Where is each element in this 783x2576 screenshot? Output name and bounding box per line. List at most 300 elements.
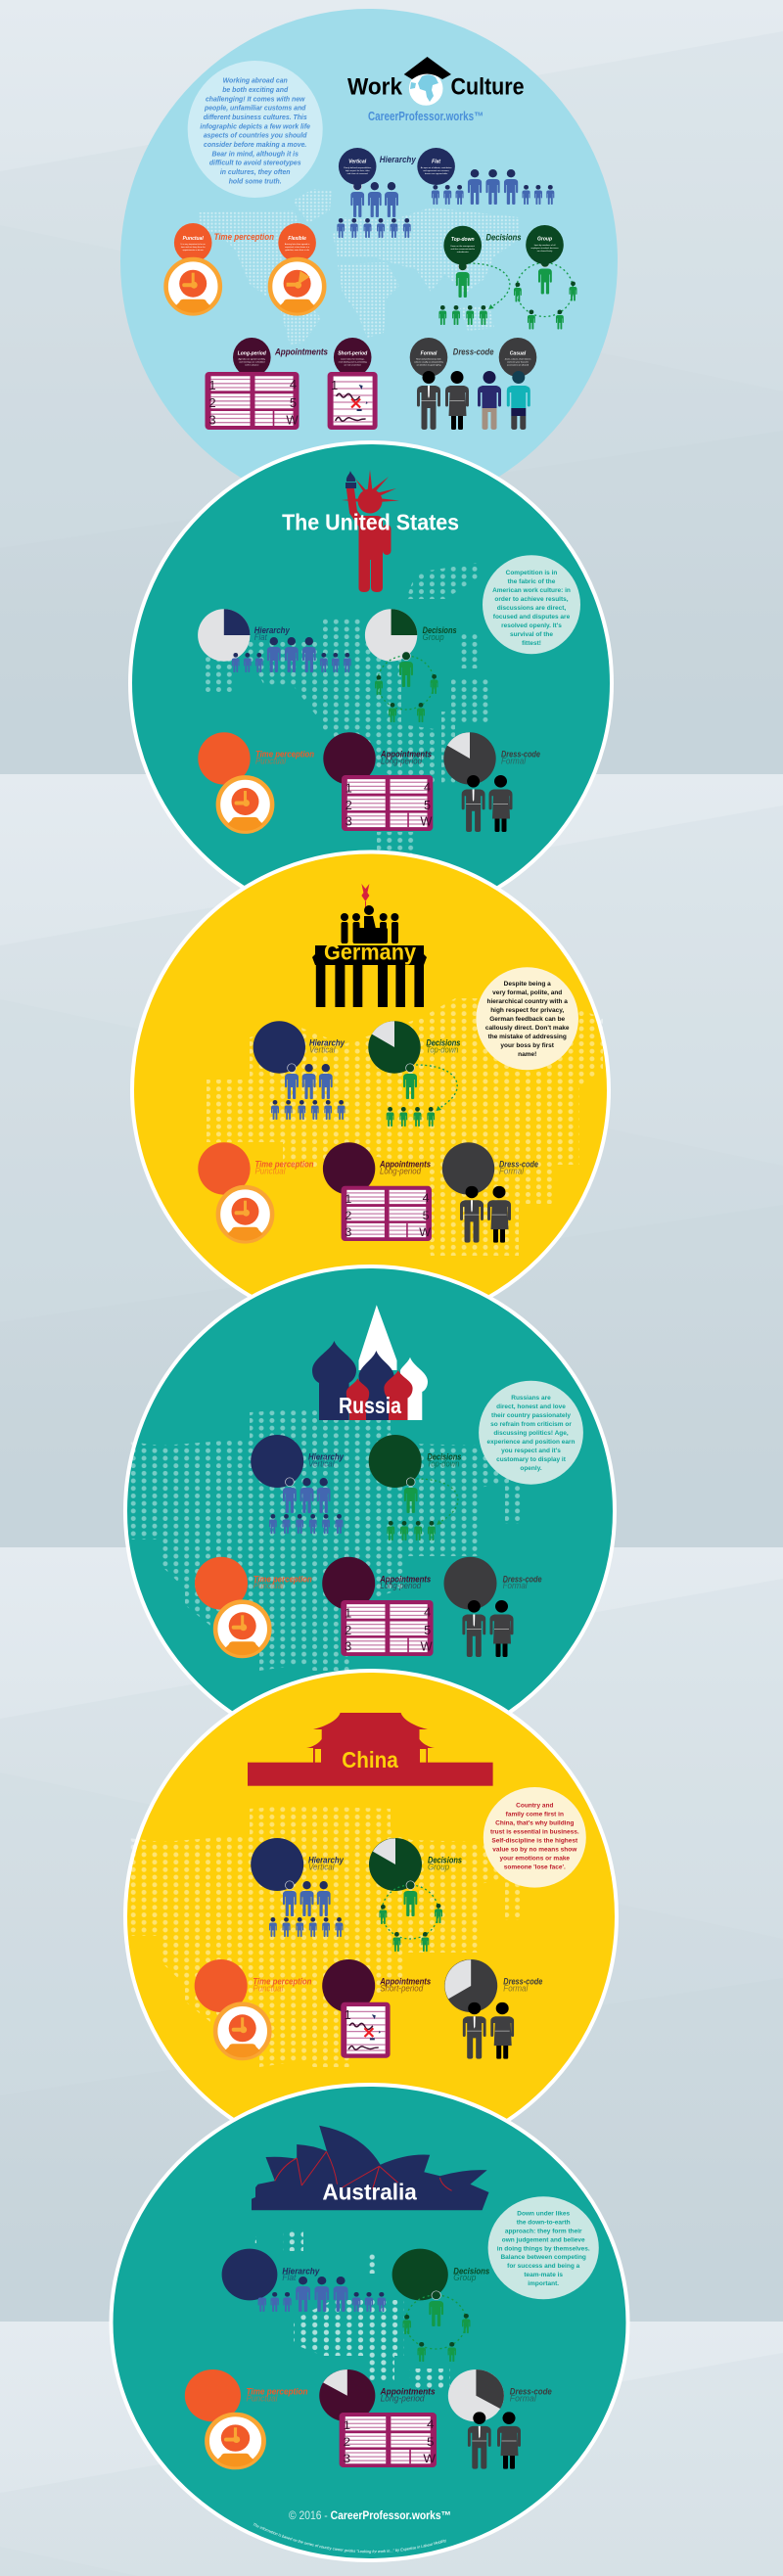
figures: vertical hierarchy (269, 1881, 343, 1937)
icon: calendar: 5 (424, 1624, 431, 1637)
icon: punctual clock (166, 259, 220, 313)
icon: calendar: 1 (345, 1192, 351, 1206)
label: hierarchy (308, 1856, 345, 1873)
dot map: China (128, 1806, 523, 2067)
icon: calendar: 5 (427, 2435, 434, 2449)
callout: United States: survival of the (510, 631, 553, 638)
callout: China: Self-discipline is the highest (491, 1838, 578, 1845)
figures: formal couple (468, 2412, 521, 2469)
icon: Brandenburg Gate (312, 884, 427, 1007)
intro text bubble: people, unfamiliar customs and (204, 106, 306, 113)
heading: decisions: Decisions (485, 232, 521, 243)
label: time perception (253, 1574, 312, 1591)
figures: group decisions (514, 258, 577, 329)
heading: dress-code: Dress-code (453, 346, 494, 357)
pie: time perception (198, 732, 251, 785)
figures: flat hierarchy (432, 169, 554, 205)
panel: Australia (110, 2083, 630, 2562)
figures: formal couple (462, 1600, 513, 1657)
icon: calendar: 4 (427, 2417, 434, 2431)
callout: Germany: callously direct. Don't make (485, 1025, 570, 1032)
bubble: flexible (278, 223, 316, 262)
callout: Australia: Down under likes (517, 2211, 570, 2218)
callout: Russia: experience and position earn (487, 1439, 575, 1446)
label: time perception: Time perception (247, 2387, 308, 2398)
hierarchy section (337, 148, 554, 238)
callout: Germany: high respect for privacy, (490, 1007, 564, 1014)
label: decisions: Decisions (453, 2266, 489, 2277)
title: Work Culture: Culture (450, 74, 525, 101)
label: dress-code: Formal (501, 757, 527, 767)
label: dress-code: Formal (503, 1581, 528, 1591)
figures: casual man and person (478, 371, 530, 430)
icon: calendar: 4 (424, 780, 431, 794)
decisions section (438, 225, 577, 329)
bubble: top-down: Down on the management (451, 245, 475, 248)
icon: short-period calendar (328, 372, 378, 430)
title: Australia: Australia (322, 2180, 417, 2205)
label: dress-code: Formal (499, 1167, 525, 1177)
bubble: formal: an attention to good styling (417, 364, 441, 366)
dot map: United States (206, 563, 488, 861)
callout: United States: the fabric of the (508, 578, 556, 585)
title: Work Culture (347, 57, 525, 106)
intro text bubble (188, 61, 323, 198)
icon: calendar: 5 (423, 1209, 430, 1222)
label: dress-code: Dress-code (499, 1160, 539, 1171)
icon: calendar: 4 (423, 1191, 430, 1205)
callout: Germany: your boss by first (500, 1042, 555, 1049)
bubble: top-down: Top-down (451, 237, 475, 243)
label: dress-code: Formal (503, 1983, 529, 1995)
bubble: flat: and agreement are common; (423, 169, 449, 172)
title: Germany: Germany (324, 940, 416, 965)
bubble: flexible: Flexible (288, 236, 306, 242)
bubble: flat: bosses are approachable (425, 172, 448, 175)
pie: hierarchy flat (222, 2249, 277, 2300)
figures: formal couple (462, 775, 513, 832)
pie: time perception (185, 2369, 241, 2421)
label: decisions (423, 625, 457, 643)
label: decisions: Group (428, 1863, 449, 1873)
label: decisions: Top-down (427, 1458, 459, 1470)
icon: calendar: W (421, 1640, 433, 1654)
callout: China: your emotions or make (500, 1856, 570, 1863)
label: time perception: Time perception (253, 1574, 312, 1585)
figures: group decisions (379, 1881, 442, 1952)
bubble: formal: Neat and professional, dark (416, 358, 442, 360)
bubble: top-down: subordinates (457, 251, 469, 253)
label: hierarchy: Flat (254, 632, 267, 643)
bubble: long-period: Agendas are agreed carefully, (239, 358, 266, 360)
label: appointments (380, 750, 432, 767)
label: dress-code: Dress-code (510, 2387, 552, 2398)
callout: Russia: direct, honest and love (496, 1403, 566, 1410)
icon: calendar: W (421, 815, 433, 829)
bubble: short-period (334, 338, 372, 377)
icon: short-period calendar (341, 2002, 391, 2058)
callout: Germany: German feedback can be (489, 1016, 566, 1023)
title: The United States: The United States (282, 510, 459, 535)
label: time perception (253, 1977, 312, 1995)
pie: dress-code (443, 732, 496, 785)
label: hierarchy: Hierarchy (308, 1452, 345, 1463)
label: hierarchy (308, 1452, 345, 1470)
callout: China (484, 1787, 586, 1888)
callout: United States: discussions are direct, (497, 605, 566, 612)
icon: calendar (340, 2413, 437, 2467)
bubble: vertical (339, 148, 377, 185)
label: decisions (428, 1856, 462, 1873)
bubble: long-period: and meetings are scheduled (239, 360, 265, 364)
bubble: flat: Flat (432, 160, 440, 165)
label: appointments (379, 1574, 431, 1591)
label: decisions: Group (453, 2273, 476, 2283)
callout: China: family come first in (506, 1812, 564, 1818)
callout: Germany: very formal, polite, and (492, 989, 562, 996)
label: decisions: Decisions (427, 1452, 461, 1463)
bubble: punctual (174, 223, 211, 262)
icon: long-period calendar: 5 (290, 395, 297, 410)
intro text bubble: in cultures, they often (220, 169, 291, 176)
label: dress-code: Dress-code (503, 1574, 542, 1585)
intro text bubble: aspects of countries you should (204, 133, 307, 140)
pie: time perception (195, 1959, 248, 2012)
label: decisions: Decisions (426, 1038, 460, 1049)
bubble: top-down: and then communicated to (450, 248, 476, 251)
label: appointments: Appointments (379, 1160, 431, 1171)
icon: long-period calendar (206, 372, 299, 430)
callout: United States: focused and disputes are (493, 614, 571, 621)
pie: dress-code (442, 1142, 494, 1195)
callout: Australia: team-mate is (524, 2272, 563, 2278)
intro text bubble: be both exciting and (222, 87, 289, 94)
label: dress-code (501, 750, 541, 767)
label: time perception: Punctual (247, 2394, 278, 2404)
label: time perception: Time perception (253, 1977, 312, 1988)
bubble: long-period: well in advance (245, 364, 259, 366)
icon: calendar (342, 1186, 432, 1241)
bubble: punctual: time and not keep them for (181, 246, 206, 249)
callout: United States: Competition is in (506, 570, 557, 576)
icon: calendar: 2 (345, 1209, 351, 1222)
bubble: flexible: expected; a time frame is a (285, 246, 310, 249)
callout: Germany (476, 967, 578, 1070)
panel: introduction (120, 9, 618, 514)
bubble: group: employees involved; decisions (530, 248, 559, 250)
figures: top-down decisions (387, 1478, 458, 1541)
panel: Germany (132, 851, 609, 1329)
icon: Statue of Liberty (342, 470, 399, 592)
icon: clock (215, 2004, 269, 2058)
intro text bubble: Bear in mind, although it is (211, 151, 299, 158)
callout: Russia: their country passionately (491, 1412, 571, 1419)
callout: Australia: own judgement and believe (502, 2236, 585, 2243)
label: decisions: Group (423, 632, 444, 643)
figures: formal couple (460, 1186, 511, 1243)
label: decisions: Decisions (428, 1856, 462, 1866)
panel: Russia (125, 1266, 615, 1756)
pie: appointments (323, 732, 376, 785)
label: appointments: Long-period (380, 1167, 422, 1177)
icon: short-period calendar: 1 (331, 378, 338, 392)
title: Work Culture: Work (347, 74, 403, 101)
intro text bubble: difficult to avoid stereotypes (209, 161, 301, 167)
label: hierarchy: Hierarchy (254, 625, 290, 636)
label: decisions: Decisions (423, 625, 457, 636)
time perception section (166, 223, 324, 313)
label: hierarchy: Flat (282, 2273, 297, 2283)
pie: appointments (323, 1142, 375, 1195)
label: dress-code (499, 1160, 539, 1177)
icon: Sydney Opera House (252, 2126, 489, 2210)
callout: Australia: the down-to-earth (517, 2220, 571, 2227)
icon: clock (218, 1187, 272, 1241)
bubble: group: Input by members of all (534, 244, 556, 247)
callout: Russia: openly. (520, 1465, 542, 1472)
label: dress-code: Dress-code (503, 1977, 543, 1988)
bubble: group: Group (537, 237, 552, 243)
bubble: flexible: Arriving later than agreed is (285, 243, 309, 246)
icon: flexible clock (270, 259, 324, 313)
label: appointments: Appointments (380, 2387, 436, 2398)
bubble: punctual: It is very important to be on (181, 243, 207, 246)
callout: Russia: customary to display it (496, 1456, 567, 1463)
icon: Kremlin domes (312, 1305, 428, 1420)
pie: hierarchy vertical (251, 1838, 303, 1891)
pie: appointments (319, 2369, 375, 2421)
icon: calendar: 3 (345, 1225, 351, 1239)
icon: calendar: 2 (344, 2435, 350, 2449)
label: decisions: Top-down (426, 1045, 458, 1056)
label: dress-code: Dress-code (501, 750, 541, 760)
bubble: casual (499, 338, 536, 377)
figures: group decisions (402, 2291, 471, 2362)
label: time perception (255, 750, 314, 767)
bubble: vertical: and chain of command (347, 173, 369, 175)
bubble: long-period (233, 338, 271, 377)
callout: China: value so by no means show (492, 1847, 577, 1854)
dot map: Australia (250, 2230, 450, 2388)
pie: decisions top-down (369, 1435, 422, 1488)
callout: Australia: important. (528, 2280, 559, 2287)
heading: appointments: Appointments (274, 346, 328, 357)
panel: The United States (130, 442, 612, 924)
label: hierarchy: Hierarchy (308, 1856, 345, 1866)
callout: Australia: in doing things by themselves. (497, 2245, 590, 2252)
callout: China: trust is essential in business. (490, 1829, 579, 1836)
figures: top-down decisions (438, 262, 510, 325)
icon: clock (215, 1602, 269, 1656)
pie: hierarchy flat (198, 609, 251, 662)
pie: appointments (322, 1959, 375, 2012)
pie: decisions group (369, 1838, 422, 1891)
label: appointments: Long-period (381, 2394, 425, 2404)
label: hierarchy: Vertical (308, 1863, 335, 1873)
title: China: China (342, 1747, 398, 1772)
callout: Germany: the mistake of addressing (488, 1034, 567, 1040)
icon: long-period calendar: 1 (208, 378, 216, 392)
pie: hierarchy vertical (253, 1021, 305, 1074)
icon: calendar: 2 (345, 799, 352, 812)
world dot map (199, 189, 519, 345)
label: appointments: Long-period (380, 1581, 422, 1591)
figures: vertical hierarchy (337, 182, 411, 238)
label: appointments (379, 1160, 431, 1177)
intro text bubble: infographic depicts a few work life (200, 123, 310, 130)
callout: China: Country and (516, 1803, 553, 1810)
label: dress-code (503, 1574, 542, 1591)
callout: Russia: Russians are (511, 1395, 551, 1402)
label: time perception: Punctual (253, 1581, 285, 1591)
bubble: group: are shared freely (537, 250, 553, 253)
label: hierarchy: Vertical (309, 1045, 336, 1056)
callout: China: China, that's why building (495, 1820, 574, 1827)
bubble: formal (410, 338, 447, 377)
brand name: CareerProfessor.works™ (368, 110, 484, 123)
callout: Russia (479, 1381, 583, 1485)
bubble: vertical: Vertical (348, 160, 367, 165)
figures: group decisions (375, 652, 438, 722)
bubble: casual: accessories are allowed (507, 364, 530, 366)
label: time perception (254, 1160, 314, 1177)
callout: Germany: name! (518, 1051, 536, 1058)
label: time perception: Punctual (253, 1983, 284, 1995)
icon: long-period calendar: 3 (208, 413, 216, 427)
icon: calendar: 3 (344, 2451, 350, 2465)
icon: calendar: 3 (345, 815, 352, 829)
icon: calendar: 5 (424, 799, 431, 812)
heading: time perception: Time perception (214, 232, 274, 243)
bubble: casual: Casual (510, 350, 527, 356)
pie: dress-code (444, 1959, 497, 2012)
callout: Australia (488, 2196, 599, 2299)
label: appointments (380, 2387, 436, 2404)
bubble: vertical: Clearly defined responsibilities, (344, 166, 372, 169)
callout: Australia: approach: they form their (505, 2228, 582, 2235)
intro text bubble: different business cultures. This (204, 115, 307, 121)
appointments section (206, 338, 378, 430)
figures: top-down decisions (387, 1064, 457, 1127)
callout: Australia: for success and being a (507, 2263, 580, 2270)
label: appointments: Appointments (380, 750, 432, 760)
icon: clock (218, 777, 272, 832)
label: appointments: Appointments (379, 1574, 431, 1585)
bubble: flat (417, 148, 455, 185)
panel: China (125, 1671, 617, 2162)
bubble: casual: and even your favourite (507, 360, 530, 364)
title: Russia: Russia (339, 1393, 401, 1418)
label: hierarchy: Hierarchy (309, 1038, 345, 1049)
pie: appointments (322, 1557, 375, 1610)
callout: United States: fittest! (522, 640, 541, 647)
heading: hierarchy: Hierarchy (380, 155, 416, 165)
icon: calendar: 1 (345, 1606, 351, 1620)
bubble: short-period: rescheduling and re-scheduling (339, 360, 367, 364)
label: dress-code (510, 2387, 552, 2404)
callout: United States: order to achieve results, (494, 596, 569, 603)
icon: calendar: 4 (424, 1606, 431, 1619)
label: hierarchy: Vertical (308, 1458, 335, 1470)
dot map: Russia (128, 1409, 523, 1671)
pie: time perception (195, 1557, 248, 1610)
icon: calendar: W (419, 1225, 431, 1239)
icon: calendar (342, 775, 433, 831)
figures: vertical hierarchy (269, 1478, 343, 1534)
label: time perception: Time perception (255, 750, 314, 760)
icon: calendar: 1 (344, 2418, 350, 2432)
pie: decisions group (392, 2249, 448, 2300)
pie: hierarchy vertical (251, 1435, 303, 1488)
callout: United States: resolved openly. It's (501, 622, 562, 629)
label: time perception: Punctual (254, 1167, 286, 1177)
bubble: casual: Jeans, colours, short sleeves (505, 358, 530, 360)
label: time perception: Punctual (255, 757, 287, 767)
bubble: formal: colours usually accompanied by (414, 360, 444, 364)
label: appointments: Long-period (381, 757, 423, 767)
bubble: flexible: guideline, more than a rule (285, 249, 310, 252)
label: hierarchy (309, 1038, 345, 1056)
icon: calendar (341, 1600, 434, 1656)
icon: calendar: 2 (345, 1624, 351, 1637)
label: decisions (426, 1038, 460, 1056)
callout: Russia: you respect and it's (501, 1448, 561, 1454)
callout: United States (483, 555, 580, 654)
label: dress-code: Formal (510, 2394, 537, 2404)
icon: long-period calendar: W (286, 413, 299, 427)
icon: Forbidden City gate (248, 1713, 493, 1786)
figures: flat hierarchy (258, 2277, 386, 2312)
callout: Germany: Despite being a (504, 981, 551, 988)
bubble: short-period: Lower notice for meetings, (341, 358, 365, 360)
label: appointments (379, 1977, 431, 1995)
label: time perception (247, 2387, 308, 2404)
bubble: short-period: Short-period (338, 350, 368, 356)
icon: calendar: W (423, 2451, 437, 2465)
bubble: punctual: appointments or dinner (183, 249, 204, 252)
intro text bubble: consider before making a move. (204, 142, 306, 149)
callout: Russia: so refrain from criticism or (490, 1421, 572, 1428)
pie: decisions group (365, 609, 417, 662)
footer: source note on arc: The information is based on the series of country career guides "Looking for work in..." by Expertise in Labour Mobility (253, 2523, 446, 2554)
label: time perception: Time perception (254, 1160, 314, 1171)
figures: formal couple (463, 2002, 514, 2059)
label: hierarchy (282, 2266, 320, 2283)
figures: flat hierarchy (232, 637, 351, 672)
pie: time perception (198, 1142, 251, 1195)
callout: Russia: discussing politics! Age, (493, 1430, 569, 1437)
label: hierarchy (254, 625, 290, 643)
intro text bubble: challenging! It comes with new (206, 96, 305, 103)
label: appointments: Appointments (379, 1977, 431, 1988)
icon: long-period calendar: 4 (290, 377, 297, 391)
bubble: long-period: Long-period (238, 350, 267, 356)
icon: long-period calendar: 2 (208, 395, 216, 410)
callout: Germany: hierarchical country with a (487, 998, 568, 1005)
icon: clock (207, 2415, 263, 2467)
dot map: Germany (207, 998, 603, 1256)
icon: calendar: 1 (345, 781, 352, 795)
label: hierarchy: Hierarchy (282, 2266, 320, 2277)
callout: China: someone 'lose face'. (504, 1864, 566, 1871)
pie: dress-code (444, 1557, 497, 1610)
label: decisions (427, 1452, 461, 1470)
figures: vertical hierarchy (271, 1064, 345, 1120)
dress-code section (410, 338, 536, 430)
intro text bubble: hold some truth. (229, 178, 282, 185)
bubble: top-down (443, 226, 482, 265)
icon: short-period calendar: 1 (345, 2008, 351, 2022)
